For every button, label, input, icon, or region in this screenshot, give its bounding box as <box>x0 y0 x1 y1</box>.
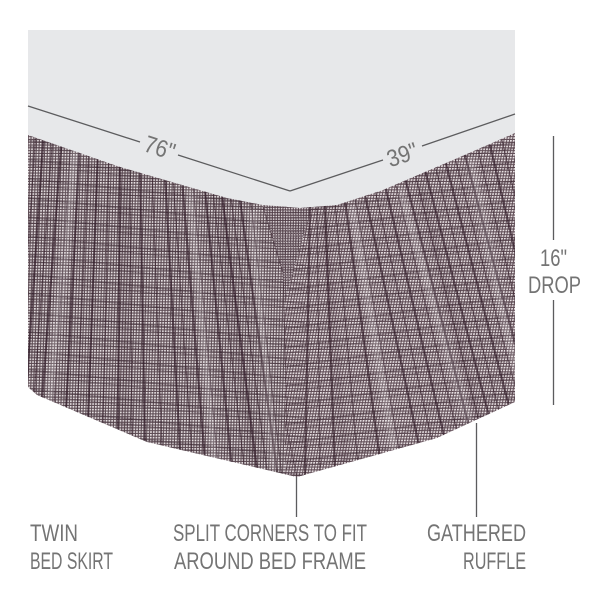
label: split corners: SPLIT CORNERS TO FIT <box>173 520 367 547</box>
label: 76 inches: 76" <box>141 131 178 166</box>
bed skirt fabric <box>28 133 515 477</box>
callout line: split corners <box>296 477 298 517</box>
label: split corners: AROUND BED FRAME <box>174 548 366 575</box>
width measurement line: 39 inches <box>290 114 515 191</box>
label: twin bed skirt: BED SKIRT <box>30 548 113 575</box>
label: gathered ruffle: GATHERED <box>427 520 526 547</box>
width measurement line: 76 inches <box>28 106 290 191</box>
label: twin bed skirt: TWIN <box>30 520 78 547</box>
drop measurement <box>528 136 581 405</box>
mattress top panel <box>28 30 515 230</box>
label: 16 inch drop: 16" <box>540 245 567 272</box>
label: gathered ruffle: RUFFLE <box>463 548 526 575</box>
label: 16 inch drop: DROP <box>528 272 581 299</box>
callout line: gathered ruffle <box>476 423 478 517</box>
label: 39 inches: 39" <box>383 138 422 173</box>
